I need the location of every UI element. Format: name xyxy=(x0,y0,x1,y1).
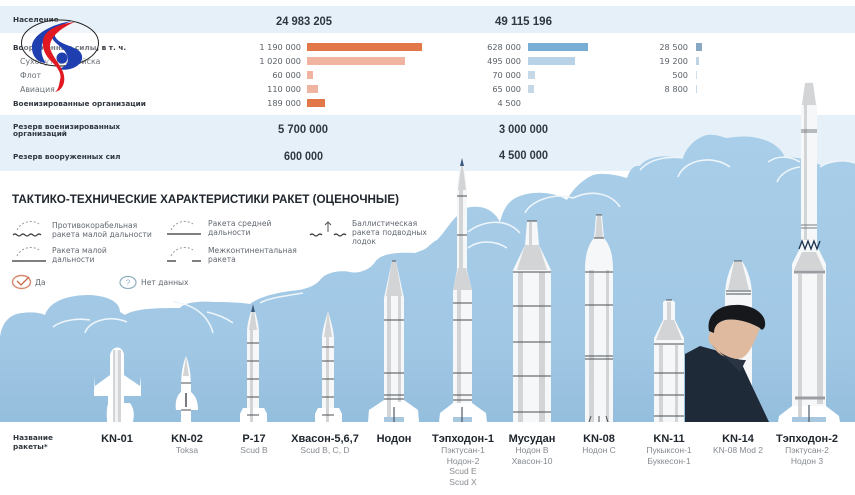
rocket: Хвасон-5,6,7 xyxy=(315,311,342,422)
rocket: Мусудан xyxy=(513,221,551,422)
legend: missile types: ракета малой дальности xyxy=(52,230,152,239)
label: Тэпходон-1: Тэпходон-1 xyxy=(432,433,494,445)
legend: missile types: дальности xyxy=(208,228,250,237)
table: armed forces: 60 000 xyxy=(272,70,301,80)
rocket: KN-02 xyxy=(176,356,198,422)
icon: submarine launched xyxy=(310,222,346,236)
table: armed forces: 500 xyxy=(672,70,688,80)
table: armed forces: 495 000 xyxy=(487,56,521,66)
label: Хвасон: Scud B, C, D xyxy=(300,445,350,455)
label: KN-11 xyxy=(646,433,692,466)
rocket: KN-01 xyxy=(94,348,141,422)
table: armed forces xyxy=(13,42,702,108)
label: Р-17 xyxy=(240,433,268,455)
icon: short range xyxy=(12,248,46,261)
rocket: KN-08 xyxy=(585,215,613,422)
text: population row: 24 983 205 xyxy=(276,14,332,28)
label: KN-02 xyxy=(171,433,203,455)
label: Р-17: Scud B xyxy=(240,445,268,455)
text: reserves xyxy=(13,122,548,163)
icon: medium range xyxy=(167,222,201,234)
table: armed forces: Авиация xyxy=(20,85,55,94)
text: reserves: Резерв вооруженных сил xyxy=(13,152,120,161)
table: armed forces: 19 200 xyxy=(659,56,688,66)
table: armed forces: 70 000 xyxy=(492,70,521,80)
table: armed forces: 4 500 xyxy=(498,98,521,108)
label: KN-11: Буккесон-1 xyxy=(647,456,691,466)
legend: missile types: Ракета средней xyxy=(208,219,272,228)
text: reserves: Резерв военизированных xyxy=(13,122,120,131)
legend: missile types: Ракета малой xyxy=(52,246,107,255)
label: Тэпходон-1: Нодон-2 xyxy=(447,456,480,466)
label: missile name heading: ракеты* xyxy=(13,442,48,451)
decorative cloud arcs xyxy=(53,157,855,333)
legend: missile types: Нет данных xyxy=(141,278,189,287)
text: reserves: 3 000 000 xyxy=(499,122,548,136)
table: armed forces: 65 000 xyxy=(492,84,521,94)
label: Тэпходон-2: Тэпходон-2 xyxy=(776,433,838,445)
label: KN-14: KN-14 xyxy=(722,433,755,445)
label: Тэпходон-1: Scud X xyxy=(449,477,477,487)
photo: portrait figure xyxy=(685,305,769,422)
table: armed forces: 110 000 xyxy=(267,84,301,94)
text: reserves: 4 500 000 xyxy=(499,148,548,162)
label: KN-08: Нодон C xyxy=(582,445,616,455)
label: missile name heading xyxy=(13,433,53,451)
rocket: Тэпхо-1 xyxy=(439,158,487,422)
legend: missile types: дальности xyxy=(52,255,94,264)
table: armed forces: 189 000 xyxy=(267,98,301,108)
legend: missile types: ракета подводных xyxy=(352,228,427,237)
label: Тэпходон-2: Нодон 3 xyxy=(791,456,823,466)
table: armed forces: 28 500 xyxy=(659,42,688,52)
label: missile name heading: Название xyxy=(13,433,53,442)
label: KN-01: KN-01 xyxy=(101,433,133,445)
text: reserves: 5 700 000 xyxy=(278,122,328,136)
rocket: Р-17 xyxy=(240,304,267,422)
rocket: Тэпхо-2 xyxy=(778,82,840,422)
table: armed forces: Сухопутные войска xyxy=(20,57,101,66)
text: population row: Население xyxy=(13,15,59,24)
label: Р-17: Р-17 xyxy=(242,433,266,445)
label: KN-11: KN-11 xyxy=(653,433,685,445)
text: population row: 49 115 196 xyxy=(495,14,552,28)
table: armed forces: Флот xyxy=(20,71,41,80)
icon: no data: ? xyxy=(126,278,131,288)
text: reserves: 600 000 xyxy=(284,149,323,163)
label: KN-14 xyxy=(713,433,763,455)
label: KN-08: KN-08 xyxy=(583,433,615,445)
label: Тэпходон-2 xyxy=(776,433,838,466)
panel: reserves band xyxy=(0,115,855,171)
rocket: KN-11 xyxy=(654,300,684,422)
icon: yes xyxy=(12,276,30,288)
text: reserves: организаций xyxy=(13,129,67,138)
label: KN-02: KN-02 xyxy=(171,433,203,445)
label: Тэпходон-1 xyxy=(432,433,494,487)
label: Тэпходон-2: Пэктусан-2 xyxy=(785,445,829,455)
legend: missile types: лодок xyxy=(352,237,376,246)
label: Тэпходон-1: Пэктусан-1 xyxy=(441,445,485,455)
legend: missile types: ракета xyxy=(208,255,236,264)
panel: population band xyxy=(0,6,855,33)
label: Мусудан: Нодон B xyxy=(515,445,549,455)
table: armed forces: 1 190 000 xyxy=(259,42,301,52)
label: KN-08 xyxy=(582,433,616,455)
table: armed forces: 628 000 xyxy=(487,42,521,52)
icon: intercontinental xyxy=(167,248,201,261)
icon: broadcaster logo xyxy=(22,20,98,92)
panel: bottom white strip xyxy=(0,422,855,495)
label: Тэпходон-1: Scud E xyxy=(449,466,477,476)
text: population row xyxy=(13,14,552,28)
rocket: KN-14 xyxy=(725,261,752,422)
panel: cloud background xyxy=(0,135,855,422)
label: Мусудан: Хвасон-10 xyxy=(512,456,553,466)
table: armed forces: 1 020 000 xyxy=(259,56,301,66)
table: armed forces: Вооружённые силы, в т. ч. xyxy=(13,43,126,52)
label: KN-14: KN-08 Mod 2 xyxy=(713,445,763,455)
heading: performance characteristics: ТАКТИКО-ТЕХНИЧЕСКИЕ ХАРАКТЕРИСТИКИ РАКЕТ (ОЦЕНОЧНЫЕ) xyxy=(12,192,399,206)
legend: missile types: Да xyxy=(35,278,46,287)
icon: anti-ship xyxy=(13,222,41,236)
label: Мусудан xyxy=(509,433,555,466)
label: KN-11: Пукыксон-1 xyxy=(646,445,692,455)
legend: missile types: Противокорабельная xyxy=(52,221,137,230)
rocket: Нодон xyxy=(368,261,419,422)
legend: missile types: Баллистическая xyxy=(352,219,417,228)
label: Мусудан: Мусудан xyxy=(509,433,555,445)
label: Хвасон xyxy=(291,433,359,455)
legend: missile types: Межконтинентальная xyxy=(208,246,297,255)
table: armed forces: Военизированные организации xyxy=(13,99,146,108)
label: Нодон: Нодон xyxy=(377,433,411,445)
label: KN-02: Toksa xyxy=(176,445,198,455)
table: armed forces: 8 800 xyxy=(665,84,688,94)
icon: no data xyxy=(120,276,136,288)
label: Хвасон: Хвасон-5,6,7 xyxy=(291,433,359,445)
legend: missile types xyxy=(12,219,427,288)
